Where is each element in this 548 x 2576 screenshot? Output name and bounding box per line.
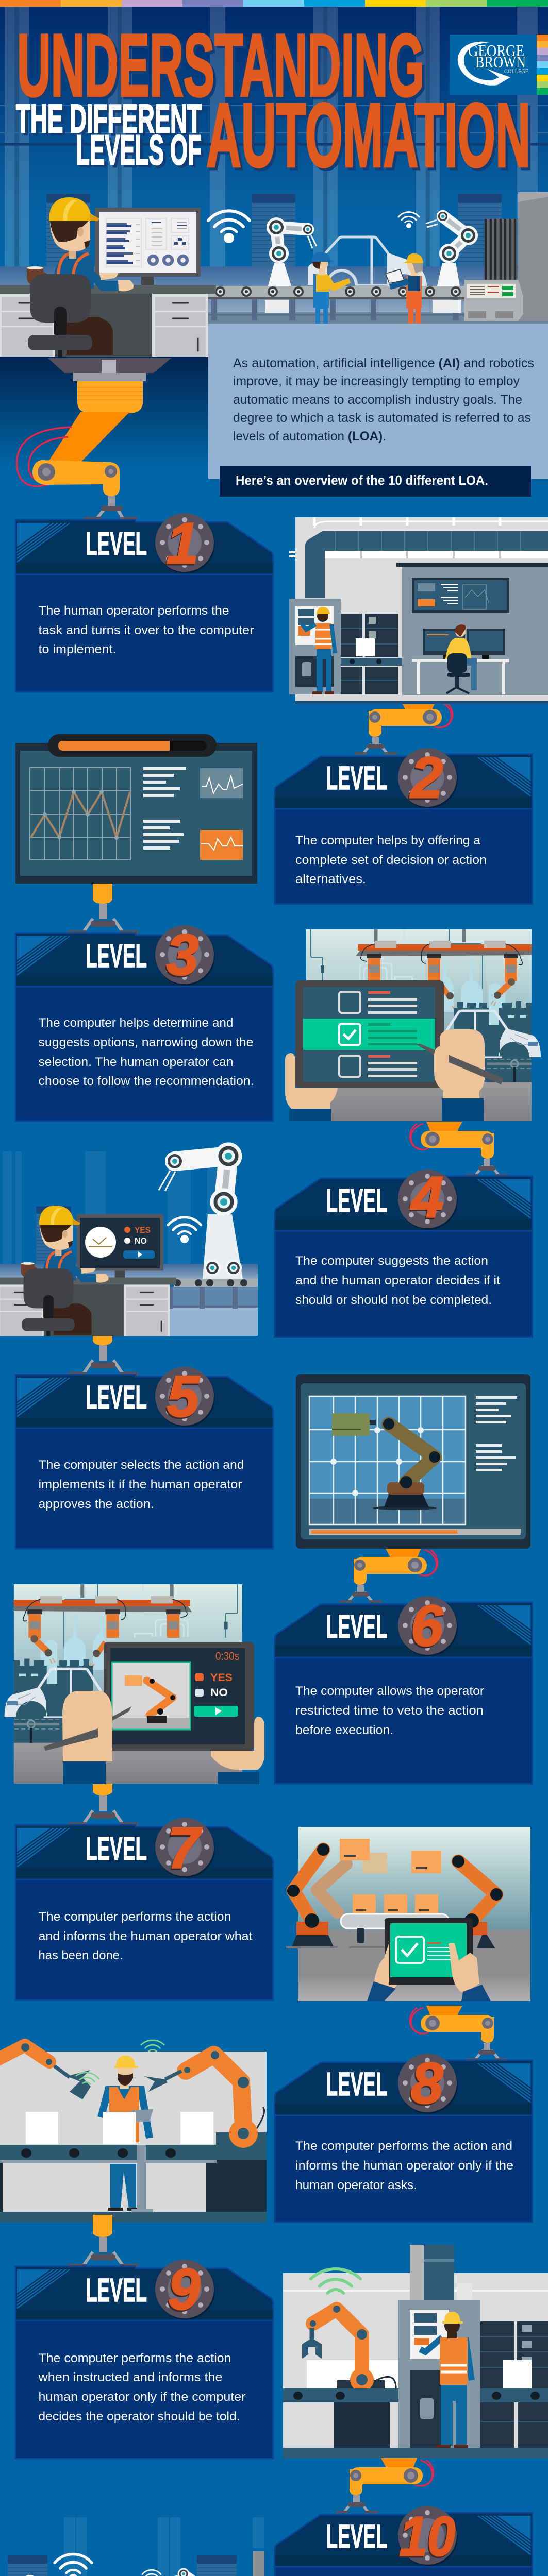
- badge: number 9: 9: [168, 2257, 200, 2321]
- text: level 2 description: alternatives.: [295, 872, 366, 886]
- figure: worker in blue overalls: [309, 252, 351, 336]
- text: level 6 description: before execution.: [295, 1723, 393, 1737]
- text: level 1 description: The human operator performs the: [38, 604, 229, 618]
- text: level 8 description: [295, 2139, 513, 2192]
- illustration: level 6 tablet with timer in factory: NO: [210, 1687, 228, 1699]
- robot arm left: [286, 1843, 338, 1948]
- text: level 4 description: The computer suggests the action: [295, 1254, 488, 1268]
- text: level 5 description: implements it if the human operator: [38, 1478, 242, 1492]
- connector arm: to level 2: [355, 700, 453, 755]
- badge: number 2: 2: [410, 745, 443, 810]
- heading: level 9: LEVEL: [86, 2272, 147, 2309]
- logo: George Brown College header: BROWN: [475, 53, 526, 71]
- badge: number 6: [398, 1594, 458, 1658]
- robot arm right: [452, 1855, 503, 1948]
- illustration: level 6 tablet with timer in factory: YES: [210, 1672, 233, 1684]
- badge: number 3: [155, 923, 215, 987]
- illustration: level 1 control room: [289, 517, 548, 704]
- badge: number 6: 6: [411, 1594, 443, 1658]
- text: level 8 description: informs the human operator only if the: [295, 2159, 513, 2173]
- text: introduction: levels of automation (LOA).: [233, 429, 386, 444]
- text: level 3 description: selection. The human operator can: [38, 1055, 233, 1069]
- badge: number 9: [155, 2257, 215, 2321]
- text: level 2 description: complete set of decision or action: [295, 853, 487, 867]
- illustration: level 6 tablet with timer in factory: 0:30s: [215, 1650, 239, 1663]
- text: level 5 description: The computer selects the action and: [38, 1458, 244, 1472]
- heading: level 6: LEVEL: [326, 1608, 388, 1645]
- text: level 8 description: human operator asks.: [295, 2178, 417, 2192]
- connector arm: to level 9: [68, 2215, 138, 2267]
- text: introduction: As automation, artificial intelligence (AI) and robotics: [233, 356, 534, 370]
- badge: number 5: 5: [167, 1364, 200, 1429]
- connector arm: to level 6: [340, 1548, 438, 1603]
- icon: hand with stylus left: [44, 1691, 131, 1784]
- heading: level 4: LEVEL: [326, 1182, 388, 1219]
- panel: level 4: [274, 1165, 532, 1337]
- illustration: operator at desk with monitor: [0, 197, 216, 357]
- text: level 1 description: task and turns it over to the computer: [38, 623, 254, 637]
- heading: level 7: LEVEL: [86, 1830, 147, 1867]
- text: level 8 description: The computer performs the action and: [295, 2139, 512, 2153]
- icon: robot arm on screen: [332, 1413, 440, 1510]
- badge: number 4: 4: [410, 1165, 443, 1229]
- figure: worker at machine: [420, 2312, 472, 2448]
- illustration: level 7 robots packing with tablet: [286, 1827, 530, 2001]
- figure: worker in orange overalls: [386, 253, 428, 334]
- figure: worker with vest: [101, 2056, 153, 2211]
- illustration: orange robotic arm from desk to level 1: [17, 358, 171, 520]
- text: level 9 description: [38, 2351, 246, 2424]
- heading: level 10: LEVEL: [326, 2518, 388, 2555]
- text: level 2 description: The computer helps by offering a: [295, 834, 481, 848]
- logo: George Brown College header: [450, 35, 548, 95]
- illustration: level 5 monitor with robot simulation: [296, 1374, 530, 1549]
- connector arm: to level 3: [68, 882, 138, 934]
- panel: level 7: [15, 1816, 273, 2000]
- title: [16, 16, 530, 186]
- light blue intro panel: [208, 324, 548, 479]
- text: level 3 description: The computer helps determine and: [38, 1016, 233, 1030]
- text: level 4 description: [295, 1254, 500, 1307]
- text: introduction: degree to which a task is automated is referred to as: [233, 411, 531, 425]
- illustration: level 8 worker with robot arms: [0, 2040, 267, 2222]
- heading: level 2: LEVEL: [326, 759, 388, 796]
- logo: George Brown College header: GEORGE: [468, 41, 524, 60]
- heading: level 8: LEVEL: [326, 2065, 388, 2103]
- logo: George Brown College header: COLLEGE: [504, 67, 528, 75]
- icon: wifi green: [75, 2071, 99, 2086]
- robot arm orange: [302, 2306, 390, 2448]
- text: level 9 description: The computer performs the action: [38, 2351, 231, 2365]
- text: level 1 description: to implement.: [38, 642, 117, 656]
- text: level 6 description: restricted time to veto the action: [295, 1704, 484, 1718]
- badge: number 1: [155, 511, 215, 575]
- text: level 6 description: The computer allows the operator: [295, 1684, 484, 1698]
- text: level 3 description: suggests options, narrowing down the: [38, 1036, 254, 1049]
- header factory scene background: [0, 7, 548, 324]
- faded robot arm: [317, 1853, 387, 1912]
- panel: level 8: [274, 2051, 532, 2222]
- panel: level 9: [15, 2257, 273, 2459]
- text: level 7 description: The computer performs the action: [38, 1910, 231, 1924]
- illustration: level 2 monitor with chart: [15, 734, 257, 884]
- panel: level 1: [15, 511, 273, 692]
- monitor screen: yes no prompt: YES: [135, 1225, 151, 1235]
- text: introduction: [233, 356, 534, 444]
- illustration: level 10 fully automated line: [0, 2517, 264, 2576]
- badge: number 2: [398, 745, 458, 810]
- icon: right hand with stylus: [416, 1029, 504, 1121]
- icon: wifi signal small: [142, 2570, 161, 2576]
- panel: level 2: [274, 745, 532, 904]
- icon: left hand holding tablet: [285, 1053, 338, 1121]
- text: level 9 description: human operator only if the computer: [38, 2390, 246, 2404]
- panel: level 5: [15, 1364, 273, 1549]
- text: level 5 description: [38, 1458, 244, 1511]
- text: level 4 description: and the human operator decides if it: [295, 1274, 500, 1287]
- icon: wifi signal large: [55, 2554, 92, 2576]
- badge: number 4: [398, 1165, 458, 1230]
- illustration: assembly line with robots: [208, 192, 548, 336]
- tablet with checklist: [295, 980, 444, 1088]
- illustration: level 3 tablet checklist in factory: [285, 929, 541, 1121]
- connector arm: to level 10: [336, 2458, 434, 2513]
- text: level 3 description: [38, 1016, 254, 1088]
- top colour bar: [0, 0, 548, 7]
- text: level 5 description: approves the action.: [38, 1497, 154, 1511]
- heading: level 1: LEVEL: [86, 525, 147, 562]
- connector arm: to level 8: [410, 2006, 508, 2061]
- navy panel under desk: [0, 357, 208, 470]
- text: level 9 description: decides the operator should be told.: [38, 2410, 240, 2424]
- panel: level 6: [274, 1594, 532, 1784]
- connector arm: to level 4: [410, 1122, 508, 1177]
- text: level 7 description: and informs the human operator what: [38, 1929, 253, 1943]
- text: level 6 description: [295, 1684, 484, 1737]
- text: level 7 description: has been done.: [38, 1948, 123, 1962]
- heading: level 5: LEVEL: [86, 1379, 147, 1416]
- robot arm right: [144, 2051, 264, 2148]
- text: level 1 description: [38, 604, 254, 656]
- title line: THE DIFFERENT: THE DIFFERENT: [16, 96, 202, 141]
- badge: number 8: 8: [411, 2051, 443, 2115]
- text: level 7 description: [38, 1910, 253, 1962]
- illustration: level 9 machine operator and robot: [283, 2245, 548, 2458]
- icon: wifi signal: [168, 1217, 201, 1243]
- text: level 9 description: when instructed and informs the: [38, 2370, 223, 2384]
- title line: LEVELS OF: LEVELS OF: [76, 127, 202, 174]
- callout: overview of LOA: Here’s an overview of the 10 different LOA.: [236, 472, 488, 488]
- badge: number 1: 1: [167, 511, 198, 575]
- icon: hands holding tablet: [367, 1942, 491, 2001]
- figure: worker at control panel: [302, 607, 335, 694]
- illustration: level 6 tablet with timer in factory: [5, 1584, 264, 1784]
- connector arm: to level 7: [68, 1773, 138, 1826]
- illustration: level 4 operator with robot: [0, 1142, 258, 1336]
- panel: level 10: [274, 2505, 532, 2576]
- icon: hand holding tablet right: [211, 1717, 264, 1784]
- figure: seated operator: [445, 624, 477, 693]
- text: introduction: automatic means to accomplish industry goals. The: [233, 393, 522, 407]
- monitor screen: yes no prompt: [80, 1218, 160, 1268]
- icon: wifi green: [141, 2040, 164, 2051]
- panel: level 3: [15, 923, 273, 1121]
- badge: number 7: 7: [168, 1816, 202, 1880]
- connector arm: to level 5: [68, 1323, 138, 1376]
- icon: wifi signal small: [398, 212, 419, 228]
- heading: level 3: LEVEL: [86, 937, 147, 974]
- text: level 3 description: choose to follow the recommendation.: [38, 1074, 254, 1088]
- text: level 2 description: [295, 834, 487, 886]
- callout: overview of LOA: [220, 466, 531, 497]
- badge: number 7: [155, 1816, 215, 1880]
- badge: number 5: [155, 1364, 215, 1429]
- text: introduction: improve, it may be increasingly tempting to employ: [233, 374, 520, 388]
- text: level 4 description: should or should not be completed.: [295, 1293, 492, 1307]
- badge: number 10: 10: [400, 2505, 455, 2567]
- badge: number 8: [398, 2051, 458, 2115]
- monitor screen: yes no prompt: NO: [135, 1236, 147, 1246]
- icon: wifi green: [311, 2269, 360, 2293]
- icon: wifi signal large: [208, 211, 250, 243]
- robot arm left: [0, 2043, 91, 2099]
- badge: number 3: 3: [167, 923, 198, 987]
